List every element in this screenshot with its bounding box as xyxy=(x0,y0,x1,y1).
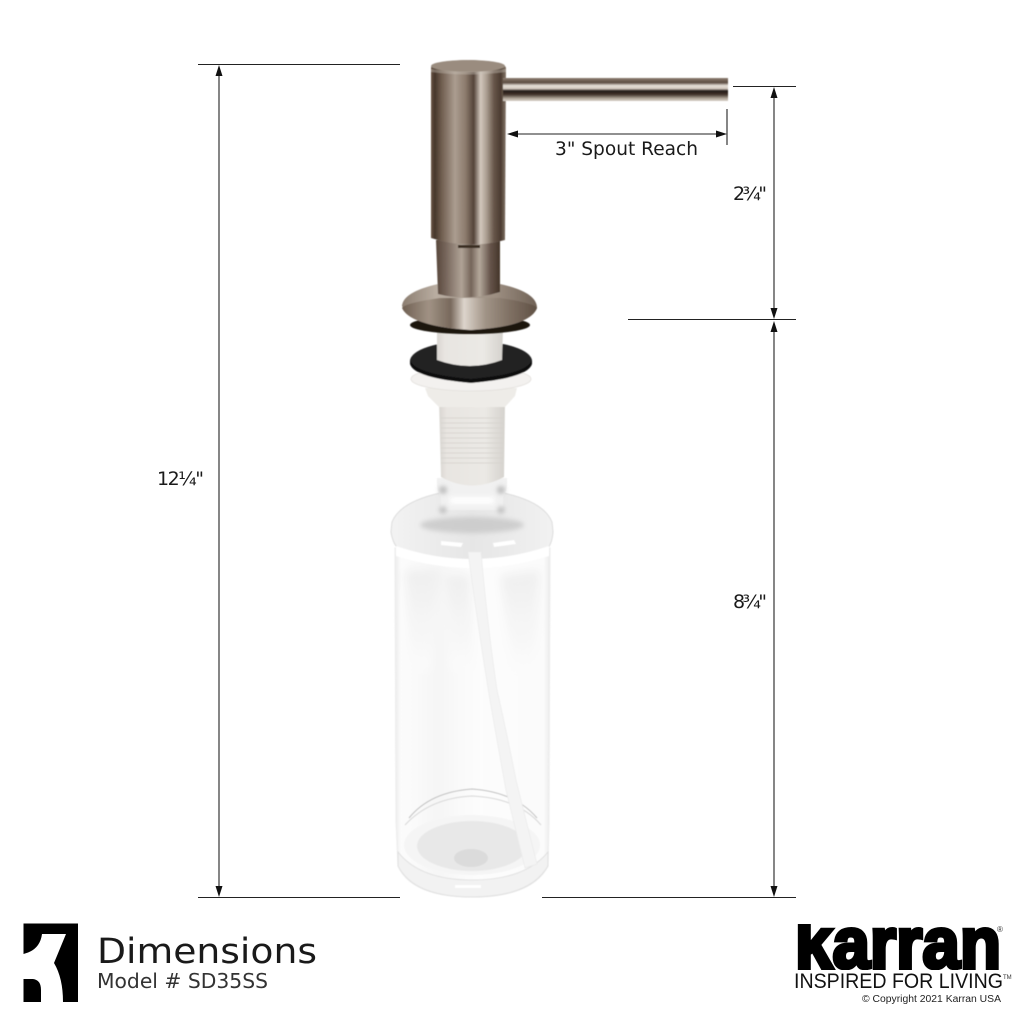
arrowheads xyxy=(216,65,778,897)
bottle base xyxy=(404,815,540,875)
shoulder band xyxy=(396,546,549,568)
bottle shoulder xyxy=(391,493,553,561)
thread xyxy=(439,400,505,486)
flange shadow xyxy=(410,316,530,334)
body streaks xyxy=(405,570,540,670)
tagline: INSPIRED FOR LIVING xyxy=(794,970,1003,993)
label: lower height: 8¾" xyxy=(733,591,767,613)
label: overall height: 12¼" xyxy=(157,468,204,490)
cylinder body xyxy=(431,60,506,245)
threaded white stem xyxy=(410,328,532,486)
black washer xyxy=(410,341,532,381)
registered mark: ® xyxy=(997,925,1003,934)
trademark: TM xyxy=(1003,975,1012,981)
soap bottle xyxy=(391,478,553,897)
upper white shank xyxy=(437,328,503,366)
dip tube xyxy=(468,552,537,868)
wordmark: karran xyxy=(795,904,1001,984)
brand logo xyxy=(796,924,1012,1004)
white collar flange xyxy=(425,388,517,407)
heading: Dimensions xyxy=(97,932,317,972)
dispenser pump head xyxy=(402,60,728,334)
bottle body xyxy=(395,548,550,897)
label: upper height: 2¾" xyxy=(733,183,767,205)
icon: Karran R mark xyxy=(24,924,78,1002)
copyright: © Copyright 2021 Karran USA xyxy=(862,994,1001,1005)
label: spout reach: 3" Spout Reach xyxy=(555,138,698,160)
dimension lines xyxy=(198,64,796,898)
flange xyxy=(402,284,537,330)
subheading: Model # SD35SS xyxy=(97,969,268,993)
bottle neck xyxy=(437,478,507,510)
spout xyxy=(503,78,728,101)
shoulder highlights xyxy=(420,486,524,533)
collar xyxy=(436,240,500,298)
